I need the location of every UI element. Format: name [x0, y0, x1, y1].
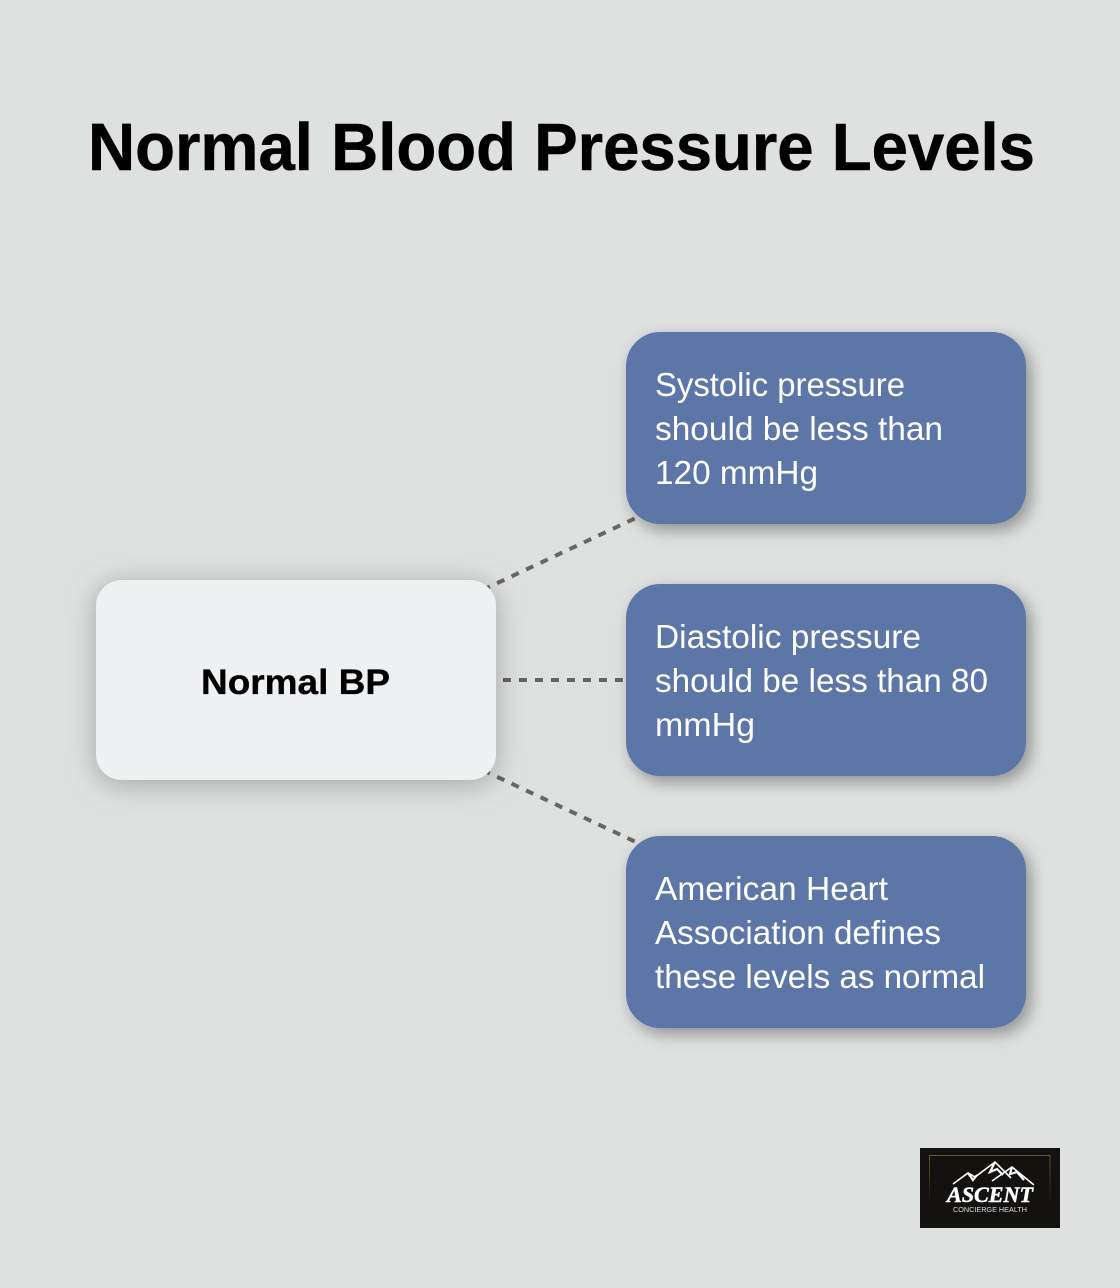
- logo: Ascent Concierge Health: [920, 1148, 1060, 1228]
- panel: diastolic: should be less than 80: [655, 662, 988, 699]
- panel: diastolic: Diastolic pressure: [655, 618, 921, 655]
- icon: mountains: [953, 1162, 1034, 1185]
- panel: American Heart Association: Association defines: [655, 914, 941, 951]
- panel: systolic: 120 mmHg: [655, 454, 818, 491]
- panel: American Heart Association: [626, 836, 1026, 1028]
- panel: normal BP: Normal BP: [201, 663, 390, 702]
- panel: systolic: [626, 332, 1026, 524]
- logo: Ascent Concierge Health: CONCIERGE HEALTH: [953, 1207, 1027, 1214]
- panel: diastolic: mmHg: [655, 706, 755, 743]
- title: Normal Blood Pressure Levels: [88, 110, 1035, 185]
- panel: systolic: should be less than: [655, 410, 943, 447]
- panel: American Heart Association: American Heart: [655, 870, 888, 907]
- connector: to diastolic: [503, 678, 624, 682]
- panel: systolic: Systolic pressure: [655, 366, 905, 403]
- panel: American Heart Association: these levels as normal: [655, 958, 985, 995]
- connector: to American Heart Association: [483, 770, 635, 842]
- logo: Ascent Concierge Health: ASCENT: [945, 1182, 1035, 1207]
- panel: diastolic: [626, 584, 1026, 776]
- panel: normal BP: [96, 580, 496, 780]
- connector: to systolic: [483, 518, 635, 590]
